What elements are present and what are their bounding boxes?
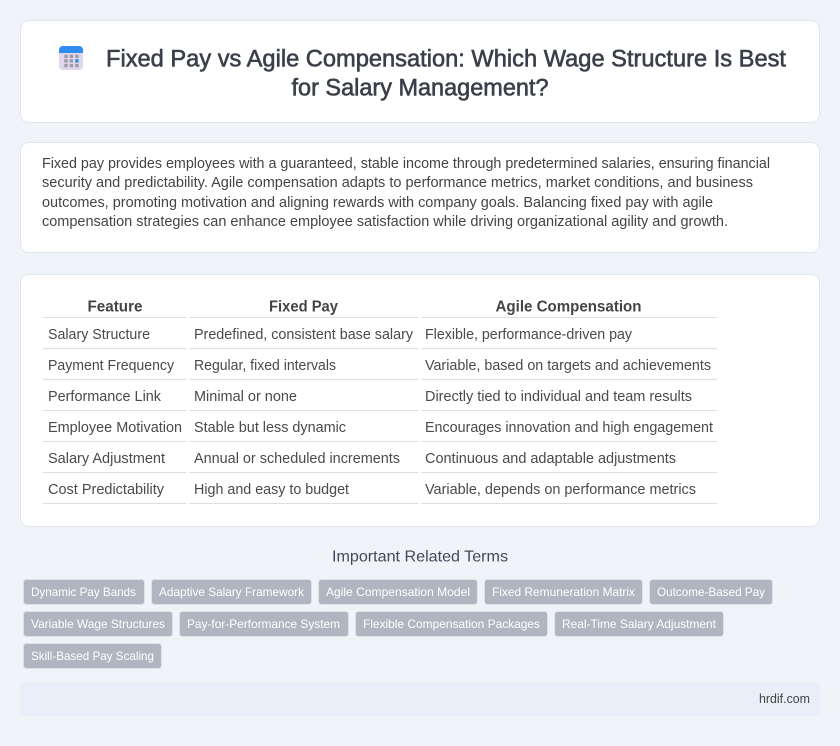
- tag: [152, 580, 312, 604]
- row: employee motivation: Stable but less dynamic: [194, 420, 346, 436]
- row: salary structure: [48, 327, 633, 343]
- row: salary adjustment: Annual or scheduled increments: [194, 451, 400, 467]
- tag: [24, 580, 144, 604]
- panel: intro paragraph: [20, 142, 820, 252]
- row: employee motivation: Encourages innovation and high engagement: [425, 420, 713, 436]
- tags: related terms: [24, 580, 772, 668]
- heading: important related terms: Important Related Terms: [332, 548, 508, 566]
- panel: intro paragraph: Fixed pay provides employees with a guaranteed, stable income through predetermined salaries, ensuring financial: [42, 156, 770, 172]
- tag: Dynamic Pay Bands: [31, 585, 136, 599]
- tag: Variable Wage Structures: [31, 617, 165, 631]
- table header: Feature: [88, 298, 143, 316]
- row: performance link: Minimal or none: [194, 389, 297, 405]
- row: performance link: [48, 389, 692, 405]
- tag: Agile Compensation Model: [326, 585, 470, 599]
- tag: [180, 612, 348, 636]
- table header: Fixed Pay: [269, 298, 338, 316]
- footer bar: [20, 682, 820, 716]
- row: salary adjustment: [48, 451, 676, 467]
- title: Fixed Pay vs Agile Compensation: Which Wage Structure Is Best: [106, 46, 786, 72]
- table header: [88, 298, 642, 316]
- tag: Pay-for-Performance System: [187, 617, 340, 631]
- row: payment frequency: Payment Frequency: [48, 358, 175, 374]
- row: salary structure: Predefined, consistent base salary: [194, 327, 414, 343]
- tag: [650, 580, 772, 604]
- row: salary adjustment: Continuous and adaptable adjustments: [425, 451, 676, 467]
- tag: [24, 644, 162, 668]
- panel: comparison table: [20, 274, 820, 526]
- table header: Agile Compensation: [496, 298, 642, 316]
- row: payment frequency: [48, 358, 711, 374]
- row: cost predictability: [48, 482, 696, 498]
- row: performance link: Directly tied to individual and team results: [425, 389, 692, 405]
- footer bar: hrdif.com: [759, 692, 810, 706]
- tag: [356, 612, 548, 636]
- panel: intro paragraph: security and predictability. Agile compensation adapts to performance metrics, market conditions, and business: [42, 175, 753, 191]
- tag: Adaptive Salary Framework: [159, 585, 305, 599]
- tag: Outcome-Based Pay: [657, 585, 765, 599]
- row: salary adjustment: Salary Adjustment: [48, 451, 165, 467]
- row: salary structure: Salary Structure: [48, 327, 150, 343]
- row: cost predictability: Variable, depends on performance metrics: [425, 482, 696, 498]
- icon: calendar: [59, 46, 83, 70]
- tag: Skill-Based Pay Scaling: [31, 649, 154, 663]
- title: [106, 46, 786, 102]
- panel: intro paragraph: outcomes, promoting motivation and aligning rewards with company goals. Balancing fixed pay with agile: [42, 195, 713, 211]
- row: cost predictability: High and easy to budget: [194, 482, 349, 498]
- tag: [24, 612, 172, 636]
- tag: Real-Time Salary Adjustment: [562, 617, 717, 631]
- title: for Salary Management?: [292, 74, 548, 102]
- row: cost predictability: Cost Predictability: [48, 482, 165, 498]
- row: employee motivation: Employee Motivation: [48, 420, 182, 436]
- tag: [318, 580, 478, 604]
- tag: [484, 580, 642, 604]
- row: payment frequency: Variable, based on targets and achievements: [425, 358, 711, 374]
- panel: header: [20, 20, 820, 122]
- row: performance link: Performance Link: [48, 389, 162, 405]
- tag: Flexible Compensation Packages: [363, 617, 540, 631]
- row: payment frequency: Regular, fixed intervals: [194, 358, 336, 374]
- tag: Fixed Remuneration Matrix: [492, 585, 635, 599]
- row: employee motivation: [48, 420, 713, 436]
- row: salary structure: Flexible, performance-driven pay: [425, 327, 633, 343]
- panel: intro paragraph: compensation strategies can enhance employee satisfaction while driving organizational agility and growth.: [42, 214, 728, 230]
- tag: [554, 612, 724, 636]
